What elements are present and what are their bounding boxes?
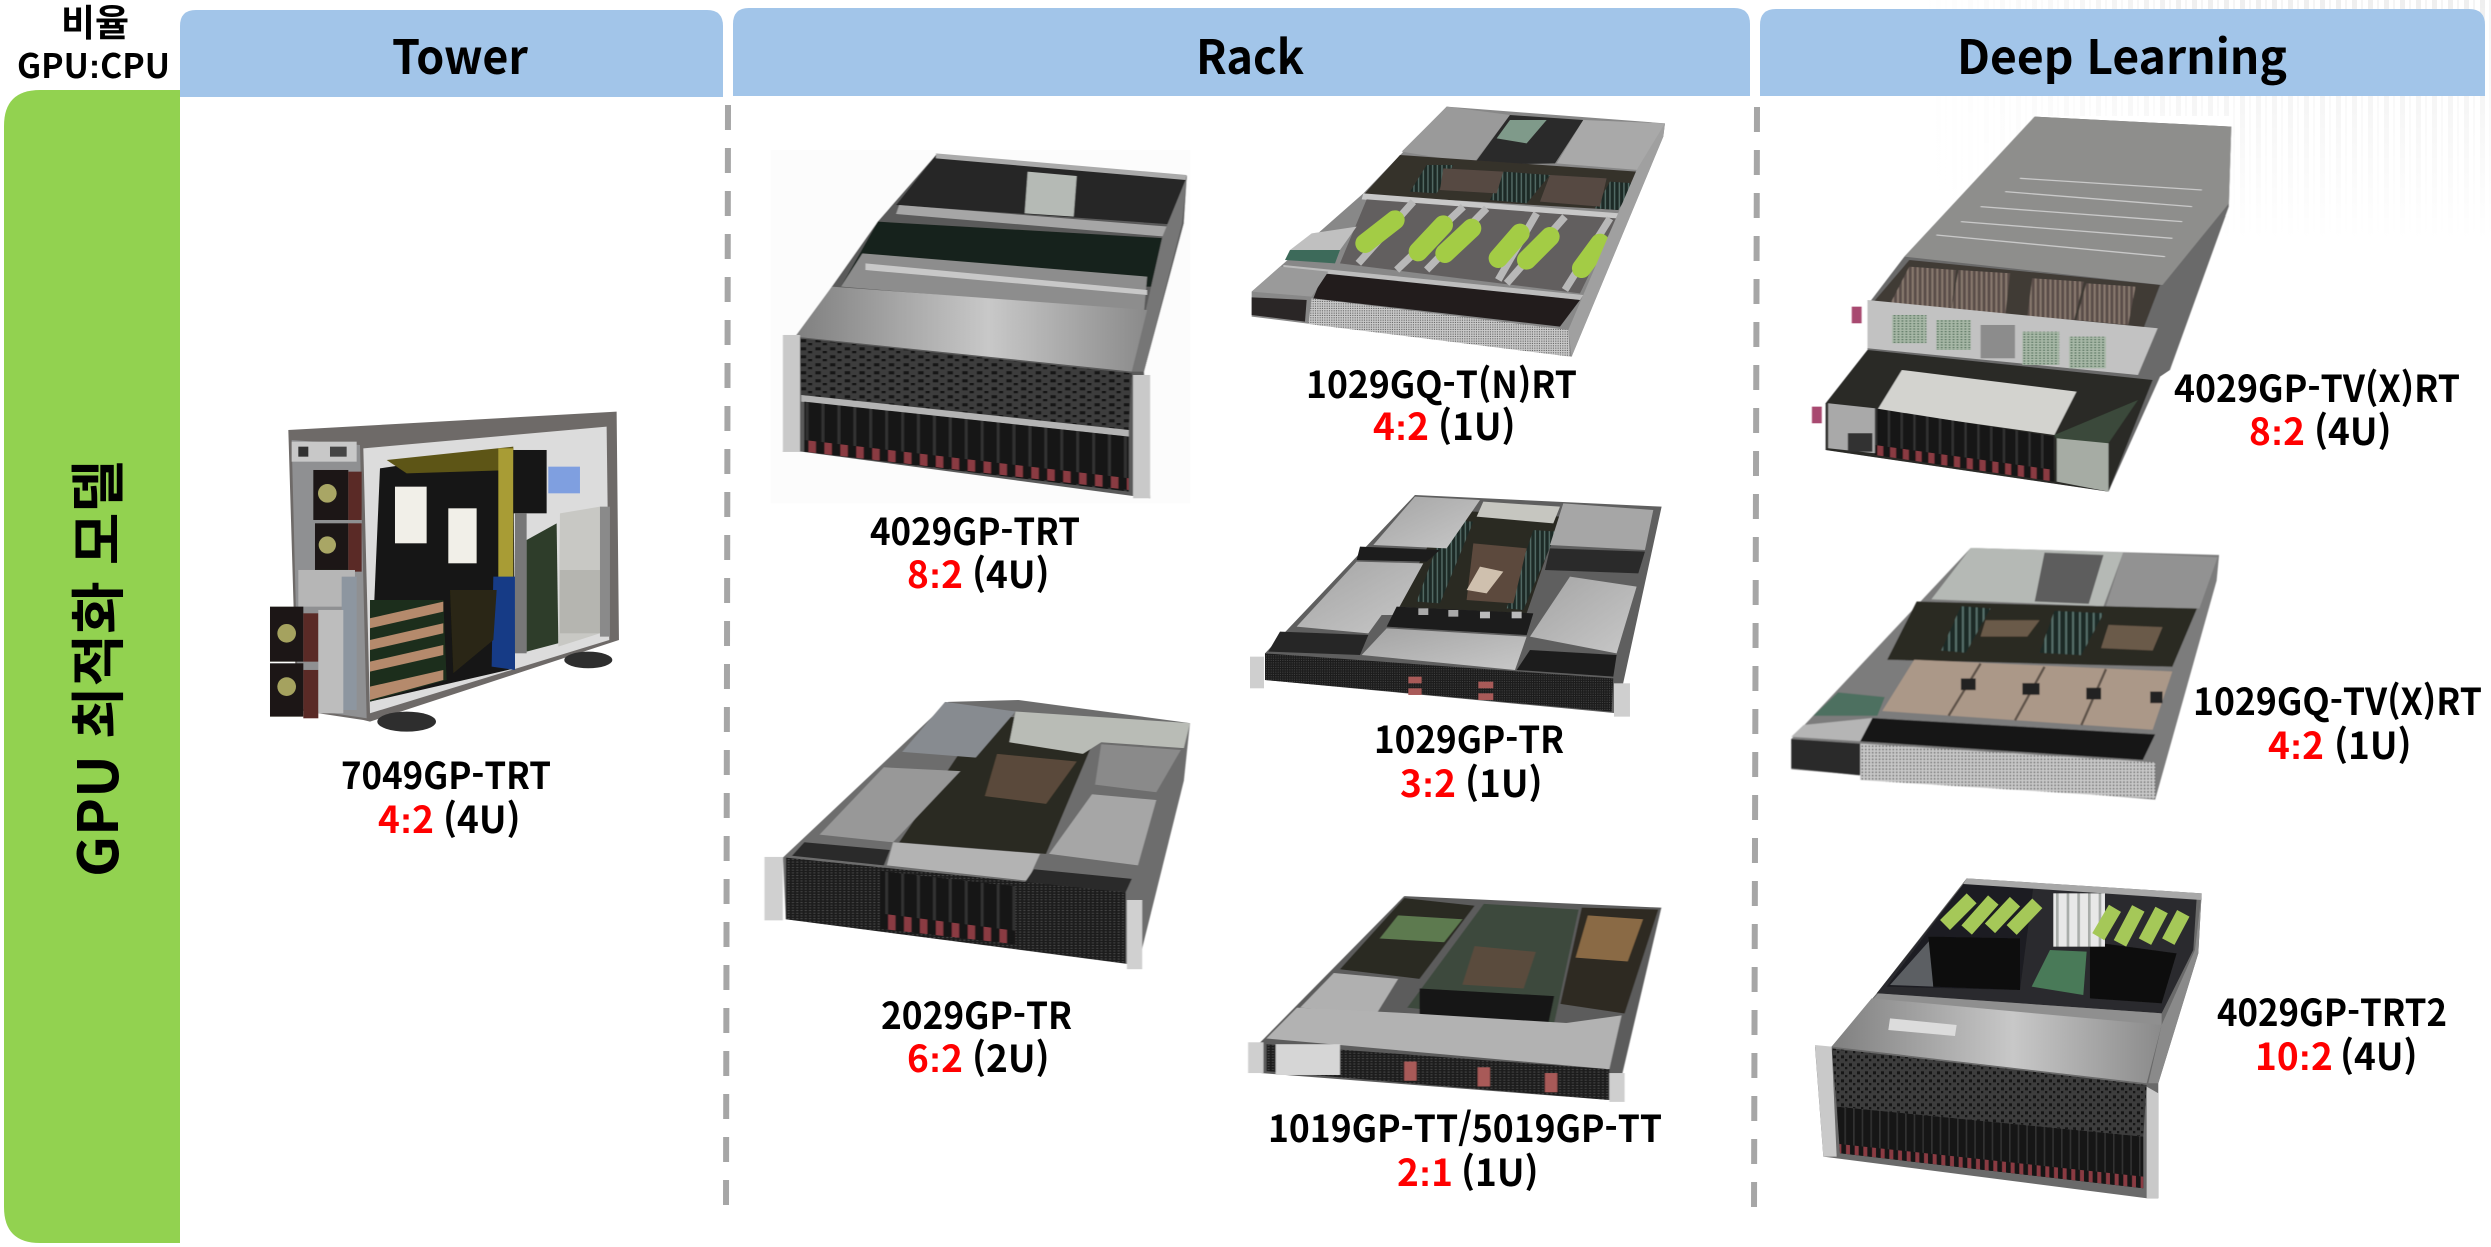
label: 1029GQ-T(N)RT [1306, 355, 1577, 451]
label: 7049GP-TRT [341, 746, 551, 844]
label: 1029GQ-TV(X)RT: 4:2 [2268, 716, 2324, 770]
label: 4029GP-TRT2: 4029GP-TRT2 [2217, 983, 2447, 1037]
label: 4029GP-TV(X)RT [2174, 359, 2460, 456]
header: Deep Learning: Deep Learning [1957, 19, 2287, 88]
label: 2029GP-TR: 2029GP-TR [881, 986, 1072, 1040]
label: 1029GP-TR: 1029GP-TR [1374, 710, 1564, 764]
label: 4029GP-TRT2: 10:2 [2255, 1027, 2333, 1081]
label: 1029GQ-T(N)RT: 4:2 [1373, 397, 1429, 451]
server image: 2029GP-TR [764, 700, 1190, 969]
background texture: top right stripes [1920, 0, 2491, 240]
column heading: ratio GPU:CPU [17, 0, 170, 88]
label: 4029GP-TV(X)RT: (4U) [2314, 402, 2391, 456]
header: Deep Learning [1760, 9, 2485, 96]
label: 1029GQ-T(N)RT: (1U) [1438, 397, 1515, 451]
server image: 1029GQ-T(N)RT [1252, 107, 1665, 357]
label: 4029GP-TRT2 [2217, 983, 2447, 1081]
label: 1019GP-TT/5019GP-TT: 2:1 [1397, 1143, 1453, 1197]
header: Tower: Tower [392, 19, 528, 88]
header: Rack: Rack [1196, 19, 1305, 88]
header: Tower [180, 10, 723, 97]
label: 4029GP-TRT: 8:2 [907, 545, 963, 599]
server image: 4029GP-TRT [771, 150, 1190, 503]
label: 1029GQ-T(N)RT: 1029GQ-T(N)RT [1306, 355, 1577, 409]
label: 2029GP-TR: 6:2 [907, 1029, 963, 1083]
label: 4029GP-TRT: 4029GP-TRT [870, 502, 1080, 556]
label: 4029GP-TRT [870, 502, 1080, 599]
header: Rack [733, 8, 1750, 96]
server image: 1019GP-TT / 5019GP-TT [1248, 896, 1661, 1102]
label: 1019GP-TT/5019GP-TT: 1019GP-TT/5019GP-TT [1268, 1099, 1662, 1153]
label: 1029GQ-TV(X)RT: 1029GQ-TV(X)RT [2193, 672, 2482, 726]
label: 1019GP-TT/5019GP-TT [1268, 1099, 1662, 1197]
label: 7049GP-TRT: 4:2 [378, 790, 434, 844]
label: 1029GQ-TV(X)RT: (1U) [2334, 716, 2411, 770]
server image: 1029GP-TR [1250, 495, 1662, 717]
label: 7049GP-TRT: 7049GP-TRT [341, 746, 551, 800]
label: 4029GP-TV(X)RT: 8:2 [2249, 402, 2305, 456]
label: 7049GP-TRT: (4U) [443, 790, 520, 844]
label: 4029GP-TV(X)RT: 4029GP-TV(X)RT [2174, 359, 2460, 413]
label: 1029GP-TR: (1U) [1465, 754, 1542, 808]
label: 4029GP-TRT2: (4U) [2340, 1027, 2417, 1081]
label: 1029GQ-TV(X)RT [2193, 672, 2482, 770]
column heading: ratio GPU:CPU: GPU:CPU [17, 39, 170, 88]
server image: 1029GQ-TV(X)RT [1791, 548, 2219, 800]
label: 2029GP-TR: (2U) [972, 1029, 1049, 1083]
label: 4029GP-TRT: (4U) [972, 545, 1049, 599]
label: 2029GP-TR [881, 986, 1072, 1083]
server image: 4029GP-TV(X)RT [1812, 116, 2233, 492]
server image: 7049GP-TRT tower [270, 412, 619, 732]
side panel: GPU optimized models [4, 90, 180, 1243]
server image: 4029GP-TRT2 [1815, 878, 2202, 1198]
side panel: GPU optimized models: GPU 최적화 모델 [54, 460, 134, 877]
label: 1029GP-TR: 3:2 [1400, 754, 1456, 808]
label: 1029GP-TR [1374, 710, 1564, 808]
label: 1019GP-TT/5019GP-TT: (1U) [1461, 1143, 1538, 1197]
